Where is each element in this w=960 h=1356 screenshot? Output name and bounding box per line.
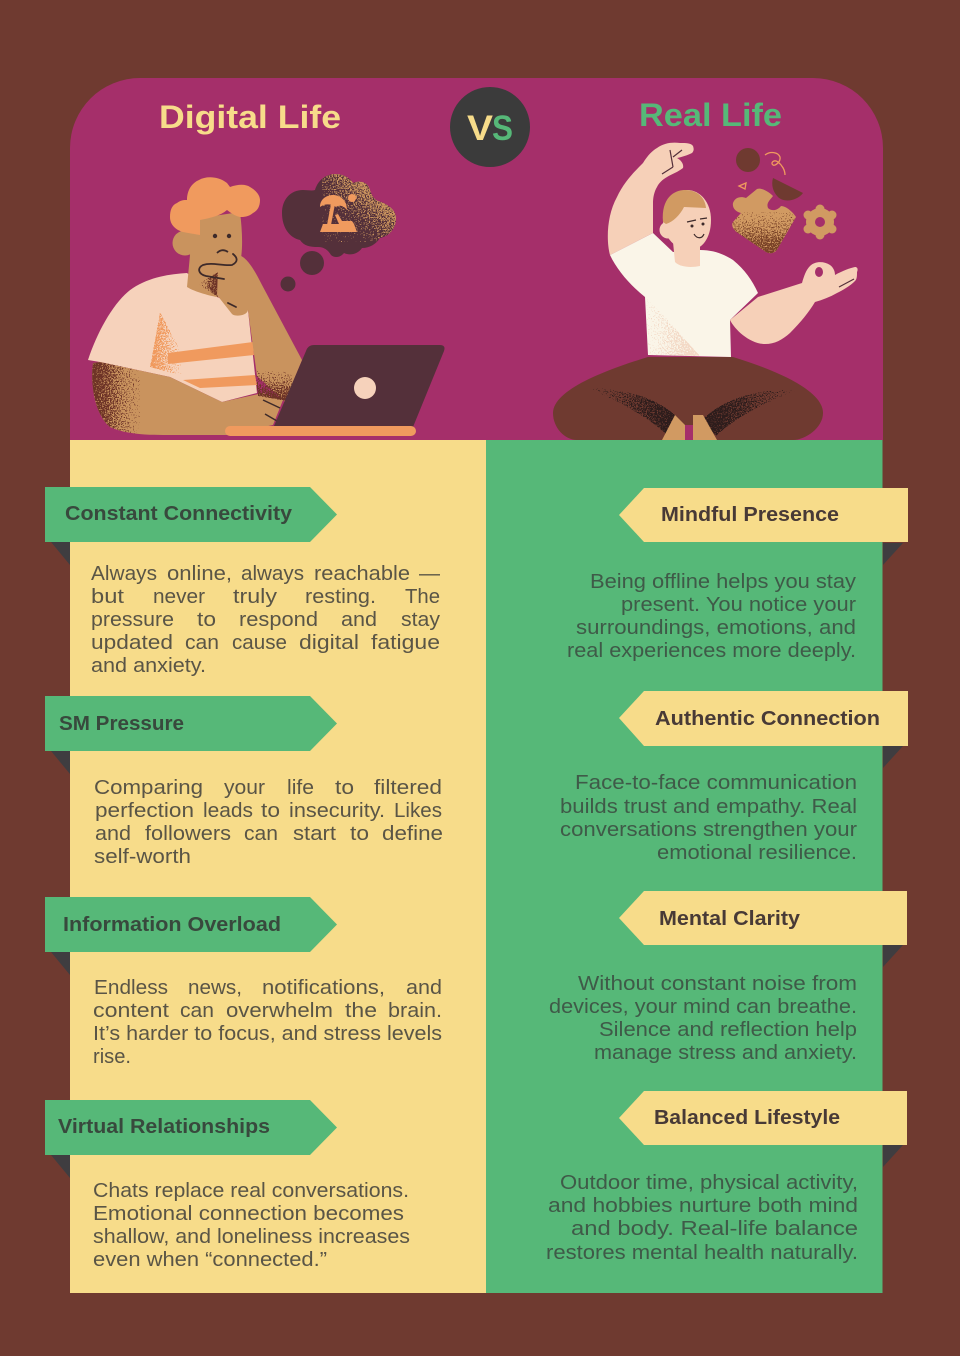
text: sm pressure body: insecurity.: [289, 800, 385, 822]
text: information overload body: news,: [188, 977, 242, 999]
text: sm pressure body: [94, 777, 443, 868]
banner: Virtual Relationships: [45, 1100, 337, 1178]
text: mental clarity body: Without constant noise from: [578, 973, 857, 995]
text: sm pressure body: followers: [145, 823, 231, 845]
text: virtual relationships body: Chats replace real conversations.: [93, 1180, 409, 1202]
text: sm pressure body: Comparing: [94, 777, 203, 799]
floating shapes: [736, 148, 803, 200]
text: virtual relationships body: even when “connected.”: [93, 1249, 327, 1271]
text: sm pressure body: filtered: [374, 777, 442, 799]
text: sm pressure body: leads: [203, 800, 253, 822]
banner: Balanced Lifestyle: Balanced Lifestyle: [654, 1107, 840, 1129]
text: constant connectivity body: cause: [232, 632, 287, 654]
text: authentic connection body: conversations strengthen your: [560, 819, 857, 841]
text: authentic connection body: emotional resilience.: [657, 842, 857, 864]
raised arm: [608, 143, 694, 255]
text: constant connectivity body: but: [91, 586, 125, 608]
banner: Virtual Relationships: Virtual Relationships: [58, 1116, 270, 1138]
banner: Constant Connectivity: Constant Connectivity: [65, 503, 293, 525]
banner: Information Overload: Information Overload: [63, 914, 281, 936]
feet: [662, 415, 717, 440]
banner: Authentic Connection: [619, 691, 908, 768]
text: information overload body: [93, 977, 442, 1068]
banner: Information Overload: [45, 897, 337, 975]
text: sm pressure body: life: [287, 777, 314, 799]
text: balanced lifestyle body: restores mental health naturally.: [546, 1242, 858, 1264]
laptop: [274, 345, 444, 427]
text: balanced lifestyle body: and body. Real-life balance: [571, 1218, 858, 1240]
text: mental clarity body: [549, 973, 857, 1064]
text: information overload body: rise.: [93, 1046, 131, 1068]
banner: Balanced Lifestyle: [619, 1091, 907, 1167]
text: constant connectivity body: never: [153, 586, 205, 608]
text: information overload body: content: [93, 1000, 170, 1022]
text: balanced lifestyle body: [546, 1172, 858, 1264]
banner: Mental Clarity: Mental Clarity: [659, 908, 801, 930]
text: constant connectivity body: pressure: [91, 609, 174, 631]
text: constant connectivity body: fatigue: [371, 632, 440, 654]
badge: VS: V: [467, 109, 494, 148]
text: sm pressure body: start: [293, 823, 336, 845]
text: information overload body: can: [180, 1000, 214, 1022]
text: authentic connection body: [560, 772, 857, 864]
text: information overload body: It’s harder to focus, and stress levels: [93, 1023, 442, 1045]
shirt stripes: [168, 342, 257, 388]
text: mindful presence body: real experiences more deeply.: [567, 640, 856, 662]
text: information overload body: and: [406, 977, 442, 999]
badge: VS: S: [492, 109, 513, 148]
raised arm and hand: [217, 254, 302, 402]
text: information overload body: brain.: [388, 1000, 442, 1022]
icon: puzzle piece: [732, 188, 796, 254]
text: constant connectivity body: Always: [91, 563, 157, 585]
badge: VS: [450, 87, 530, 167]
banner: Mental Clarity: [619, 891, 907, 967]
shirt: [610, 233, 758, 357]
text: mental clarity body: devices, your mind can breathe.: [549, 996, 857, 1018]
illustration: man at laptop: [88, 172, 444, 436]
head: [660, 190, 711, 250]
text: constant connectivity body: always: [241, 563, 304, 585]
text: balanced lifestyle body: and hobbies nurture both mind: [548, 1195, 858, 1217]
banner: Mindful Presence: Mindful Presence: [661, 504, 839, 526]
banner: Constant Connectivity: [45, 487, 337, 565]
text: sm pressure body: to: [350, 823, 369, 845]
text: constant connectivity body: and: [341, 609, 377, 631]
text: mental clarity body: manage stress and anxiety.: [594, 1042, 857, 1064]
text: sm pressure body: your: [224, 777, 265, 799]
text: virtual relationships body: shallow, and loneliness increases: [93, 1226, 410, 1248]
neck: [673, 242, 700, 267]
text: constant connectivity body: online,: [167, 563, 232, 585]
text: mental clarity body: Silence and reflection help: [599, 1019, 857, 1041]
text: constant connectivity body: updated: [91, 632, 173, 654]
banner: SM Pressure: [45, 696, 337, 774]
text: virtual relationships body: [93, 1180, 410, 1271]
text: constant connectivity body: and anxiety.: [91, 655, 206, 677]
text: information overload body: Endless: [94, 977, 168, 999]
text: information overload body: notifications,: [262, 977, 385, 999]
torso: striped shirt: [88, 273, 257, 402]
panel: real life column: [486, 440, 882, 1293]
hair: [170, 177, 260, 235]
lower arm: [92, 362, 283, 435]
text: mindful presence body: [567, 571, 856, 662]
icon: beach umbrella: [320, 194, 357, 232]
text: sm pressure body: to: [335, 777, 354, 799]
text: constant connectivity body: resting.: [305, 586, 376, 608]
heading: Digital Life: Digital Life: [159, 99, 341, 135]
extended arm: [730, 262, 858, 344]
banner: Authentic Connection: Authentic Connection: [655, 708, 880, 730]
text: virtual relationships body: Emotional connection becomes: [93, 1203, 404, 1225]
text: information overload body: the: [345, 1000, 377, 1022]
crossed legs: [553, 357, 823, 440]
text: constant connectivity body: stay: [401, 609, 440, 631]
text: sm pressure body: self-worth: [94, 846, 191, 868]
text: information overload body: overwhelm: [226, 1000, 333, 1022]
text: sm pressure body: Likes: [394, 800, 442, 822]
face details: [213, 234, 231, 238]
text: sm pressure body: perfection: [95, 800, 194, 822]
illustration: meditating person: [553, 143, 858, 440]
thought cloud: [280, 172, 398, 292]
icon: gear: [804, 204, 836, 240]
text: constant connectivity body: respond: [239, 609, 318, 631]
text: constant connectivity body: to: [197, 609, 216, 631]
text: constant connectivity body: digital: [299, 632, 359, 654]
text: mindful presence body: Being offline helps you stay: [590, 571, 856, 593]
text: mindful presence body: present. You notice your: [621, 594, 856, 616]
text: sm pressure body: can: [244, 823, 278, 845]
heading: Real Life: Real Life: [639, 97, 782, 133]
text: constant connectivity body: —: [419, 563, 440, 585]
banner: Mindful Presence: [619, 488, 908, 565]
text: mindful presence body: surroundings, emotions, and: [576, 617, 856, 639]
text: sm pressure body: and: [95, 823, 131, 845]
head and neck: [187, 212, 242, 298]
text: constant connectivity body: The: [405, 586, 440, 608]
text: authentic connection body: Face-to-face communication: [575, 772, 857, 794]
text: constant connectivity body: truly: [233, 586, 277, 608]
panel: digital life column: [70, 440, 486, 1293]
text: constant connectivity body: can: [185, 632, 219, 654]
text: sm pressure body: define: [382, 823, 443, 845]
text: constant connectivity body: reachable: [314, 563, 410, 585]
text: sm pressure body: to: [261, 800, 280, 822]
banner: SM Pressure: SM Pressure: [59, 713, 184, 735]
text: balanced lifestyle body: Outdoor time, physical activity,: [560, 1172, 858, 1194]
text: constant connectivity body: [91, 563, 440, 677]
text: authentic connection body: builds trust and empathy. Real: [560, 796, 857, 818]
panel: header: [70, 78, 883, 440]
